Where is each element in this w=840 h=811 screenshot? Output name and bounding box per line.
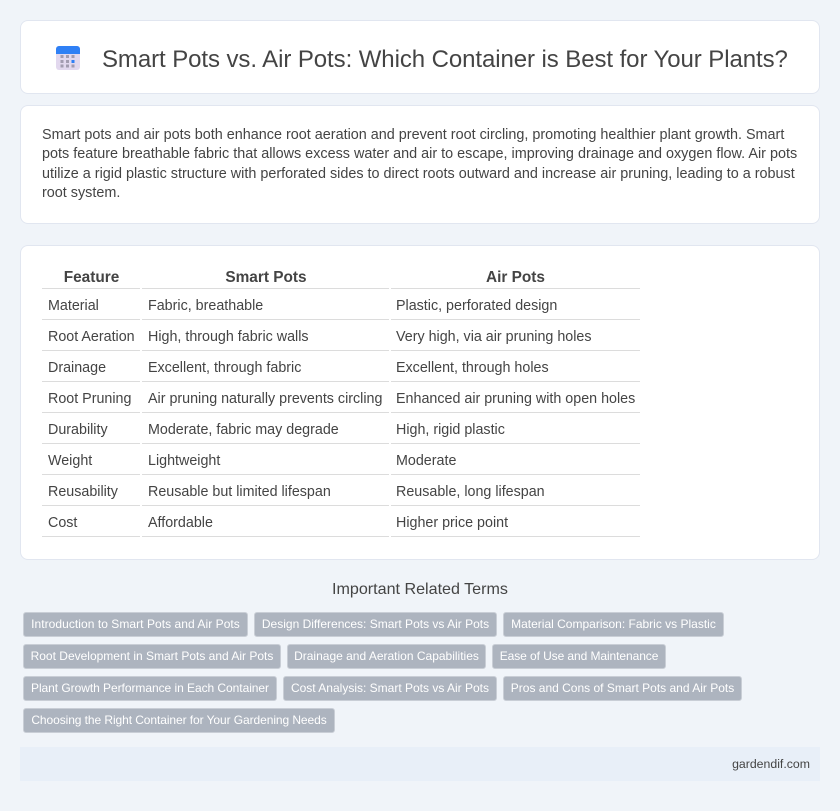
comparison table: Cost xyxy=(48,515,77,531)
comparison table: Reusable but limited lifespan xyxy=(148,484,331,500)
summary text: pots feature breathable fabric that allows excess water and air to escape, improving drainage and oxygen flow. Air pots xyxy=(42,146,797,162)
comparison table: Root Aeration xyxy=(48,329,135,345)
comparison table: Durability xyxy=(48,422,108,438)
comparison table: Moderate xyxy=(396,453,456,469)
panel: summary xyxy=(20,105,820,224)
comparison table: Material xyxy=(48,298,99,314)
comparison table: Air Pots xyxy=(486,269,545,286)
summary text: utilize a rigid plastic structure with perforated sides to direct roots outward and increase air pruning, leading to a robust xyxy=(42,166,795,182)
comparison table: High, through fabric walls xyxy=(148,329,309,345)
related terms tags: Drainage and Aeration Capabilities xyxy=(294,649,479,663)
comparison table: Root Pruning xyxy=(48,391,131,407)
comparison table: Reusable, long lifespan xyxy=(396,484,545,500)
related terms tags: Root Development in Smart Pots and Air Pots xyxy=(31,649,273,663)
comparison table: Affordable xyxy=(148,515,213,531)
related terms heading: Important Related Terms xyxy=(332,580,508,598)
title: Smart Pots vs. Air Pots: Which Container is Best for Your Plants? xyxy=(102,46,788,73)
comparison table: High, rigid plastic xyxy=(396,422,505,438)
panel: comparison table xyxy=(20,245,820,560)
footer xyxy=(20,747,820,781)
summary text: root system. xyxy=(42,185,120,201)
comparison table: Excellent, through fabric xyxy=(148,360,301,376)
icon: calendar xyxy=(56,46,80,70)
comparison table: Air pruning naturally prevents circling xyxy=(148,391,382,407)
comparison table: Smart Pots xyxy=(225,269,307,286)
related terms tags: Design Differences: Smart Pots vs Air Pots xyxy=(262,617,489,631)
related terms tags: Cost Analysis: Smart Pots vs Air Pots xyxy=(291,681,489,695)
summary text xyxy=(42,127,797,201)
comparison table: Feature xyxy=(64,269,119,286)
comparison table: Moderate, fabric may degrade xyxy=(148,422,339,438)
comparison table: Drainage xyxy=(48,360,106,376)
comparison table: Enhanced air pruning with open holes xyxy=(396,391,635,407)
comparison table: Fabric, breathable xyxy=(148,298,263,314)
comparison table: Excellent, through holes xyxy=(396,360,549,376)
related terms tags: Introduction to Smart Pots and Air Pots xyxy=(31,617,240,631)
header card xyxy=(20,20,820,94)
comparison table xyxy=(42,269,640,537)
related terms tags: Plant Growth Performance in Each Container xyxy=(31,681,269,695)
summary text: Smart pots and air pots both enhance root aeration and prevent root circling, promoting healthier plant growth. Smart xyxy=(42,127,784,143)
comparison table: Lightweight xyxy=(148,453,220,469)
related terms tags: Pros and Cons of Smart Pots and Air Pots xyxy=(511,681,734,695)
comparison table: Very high, via air pruning holes xyxy=(396,329,592,345)
comparison table: Weight xyxy=(48,453,92,469)
comparison table: Higher price point xyxy=(396,515,508,531)
comparison table: Plastic, perforated design xyxy=(396,298,557,314)
comparison table: Reusability xyxy=(48,484,118,500)
related terms tags: Material Comparison: Fabric vs Plastic xyxy=(511,617,716,631)
related terms tags: Ease of Use and Maintenance xyxy=(500,649,658,663)
related terms tags: Choosing the Right Container for Your Gardening Needs xyxy=(31,713,327,727)
footer source label: gardendif.com xyxy=(732,757,810,771)
